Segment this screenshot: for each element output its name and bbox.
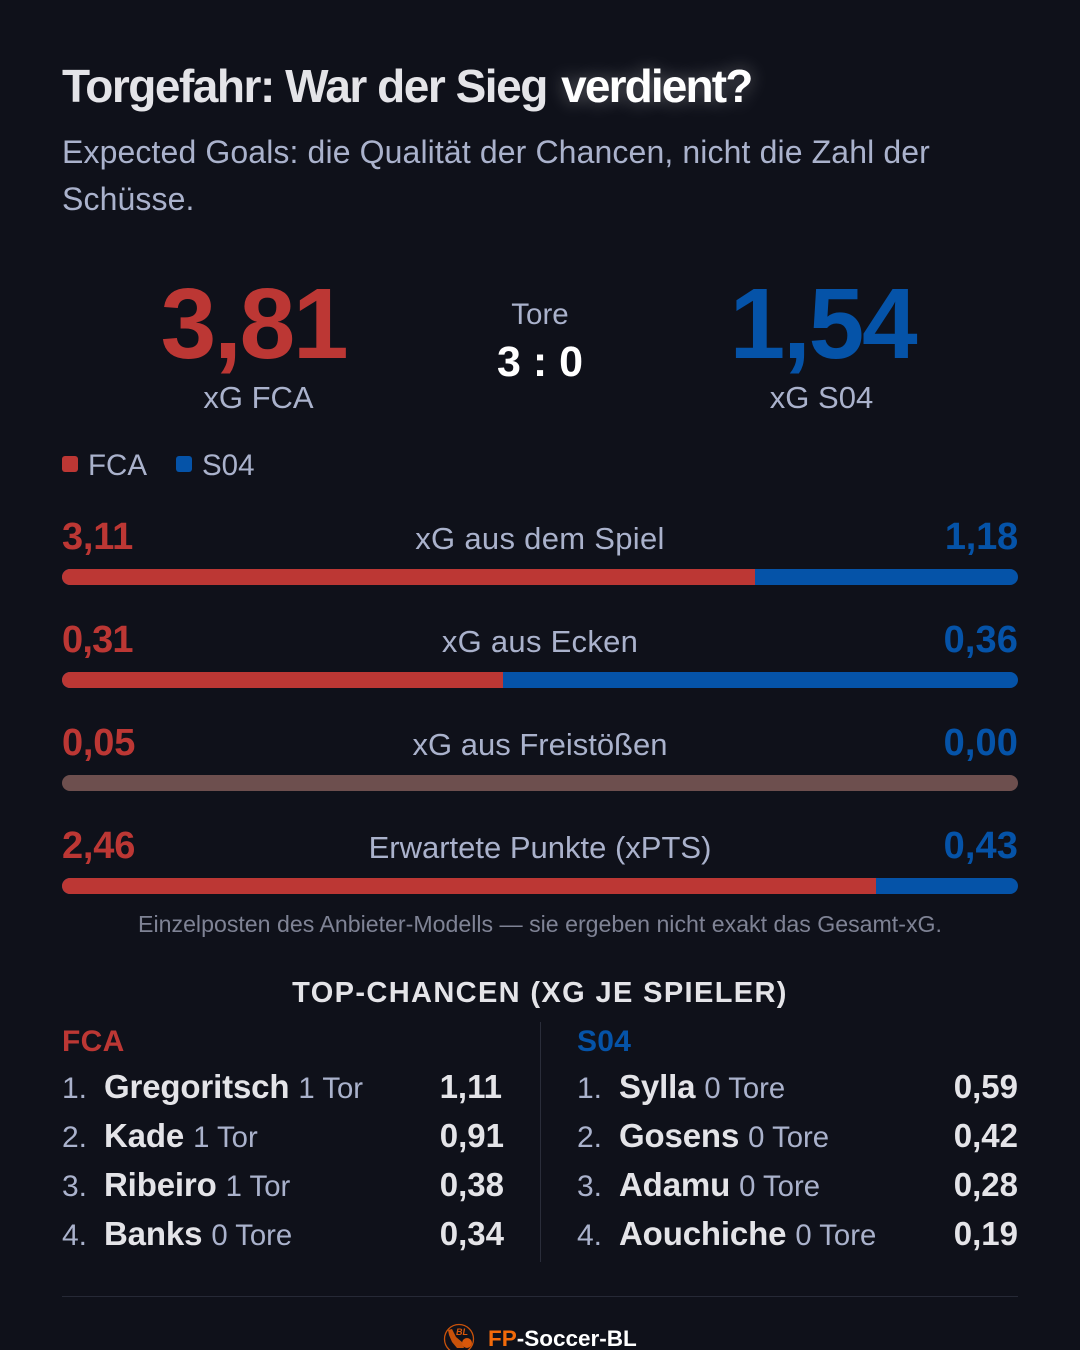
panel: S04 chances: 4.	[577, 1219, 602, 1252]
row: xG aus Ecken: 0,36	[944, 619, 1018, 661]
panel: FCA chances: 0,38	[440, 1166, 504, 1203]
panel: FCA chances: FCA	[62, 1025, 125, 1058]
panel: FCA chances: Kade 1 Tor	[104, 1117, 258, 1154]
panel: FCA chances: Banks 0 Tore	[104, 1215, 292, 1252]
section heading: TOP-CHANCEN (XG JE SPIELER)	[292, 977, 788, 1009]
row: xG aus dem Spiel	[62, 516, 1018, 585]
panel: S04 chances: 0,59	[954, 1068, 1018, 1105]
stat: goals: Tore	[511, 298, 569, 331]
stat: goals: 3 : 0	[497, 338, 583, 386]
panel: FCA chances: 2.	[62, 1121, 87, 1154]
stat: xG FCA: xG FCA	[203, 380, 314, 415]
stat: goals	[497, 298, 583, 386]
icon: logo	[444, 1324, 474, 1350]
panel: S04 chances: 0,42	[954, 1117, 1018, 1154]
panel: S04 chances: 1.	[577, 1072, 602, 1105]
divider	[540, 1022, 541, 1262]
panel: FCA chances: Ribeiro 1 Tor	[104, 1166, 290, 1203]
panel: FCA chances: 1,11	[440, 1068, 502, 1105]
panel: S04 chances	[577, 1025, 1018, 1252]
panel: FCA chances: Gregoritsch 1 Tor	[104, 1068, 363, 1105]
panel: FCA chances: 1.	[62, 1072, 87, 1105]
row: Erwartete Punkte	[62, 825, 1018, 894]
stat: xG S04: xG S04	[770, 380, 873, 415]
panel: S04 chances: 0,19	[954, 1215, 1018, 1252]
row: xG aus Freistößen	[62, 722, 1018, 791]
panel: FCA chances	[62, 1025, 504, 1252]
row: Erwartete Punkte: 0,43	[944, 825, 1018, 867]
panel: FCA chances: 0,91	[440, 1117, 504, 1154]
row: xG aus Freistößen: xG aus Freistößen	[412, 727, 667, 762]
subtitle: Schüsse.	[62, 181, 195, 217]
legend: FCA	[88, 449, 147, 482]
subtitle	[62, 134, 930, 217]
icon: logo: BL	[456, 1327, 468, 1337]
panel: S04 chances: Gosens 0 Tore	[619, 1117, 829, 1154]
row: xG aus dem Spiel: 1,18	[945, 516, 1018, 558]
row: xG aus Freistößen: 0,00	[944, 722, 1018, 764]
row: xG aus dem Spiel: xG aus dem Spiel	[415, 521, 665, 556]
legend: S04	[202, 449, 254, 482]
panel: FCA chances: 0,34	[440, 1215, 504, 1252]
stat: xG FCA: 3,81	[161, 268, 346, 380]
footer rule	[62, 1296, 1018, 1297]
panel: S04 chances: 0,28	[954, 1166, 1018, 1203]
panel: FCA chances: 4.	[62, 1219, 87, 1252]
panel: FCA chances: 3.	[62, 1170, 87, 1203]
panel: S04 chances: S04	[577, 1025, 631, 1058]
row: xG aus Ecken: xG aus Ecken	[442, 624, 638, 659]
title: Torgefahr: War der Sieg verdient?	[62, 60, 752, 112]
subtitle: Expected Goals: die Qualität der Chancen, nicht die Zahl der	[62, 134, 930, 170]
row: xG aus Freistößen: 0,05	[62, 722, 135, 764]
row: xG aus Ecken: 0,31	[62, 619, 133, 661]
row: xG aus Ecken	[62, 619, 1018, 688]
panel: S04 chances: Aouchiche 0 Tore	[619, 1215, 876, 1252]
row: xG aus dem Spiel: 3,11	[62, 516, 133, 558]
panel: S04 chances: Sylla 0 Tore	[619, 1068, 785, 1105]
panel: S04 chances: 3.	[577, 1170, 602, 1203]
footnote: Einzelposten des Anbieter-Modells — sie ergeben nicht exakt das Gesamt-xG.	[138, 911, 942, 937]
row: Erwartete Punkte: 2,46	[62, 825, 135, 867]
panel: S04 chances: Adamu 0 Tore	[619, 1166, 820, 1203]
row: Erwartete Punkte: Erwartete Punkte (xPTS)	[369, 830, 711, 865]
stat: xG S04: 1,54	[730, 268, 915, 380]
panel: S04 chances: 2.	[577, 1121, 602, 1154]
legend	[62, 449, 254, 482]
